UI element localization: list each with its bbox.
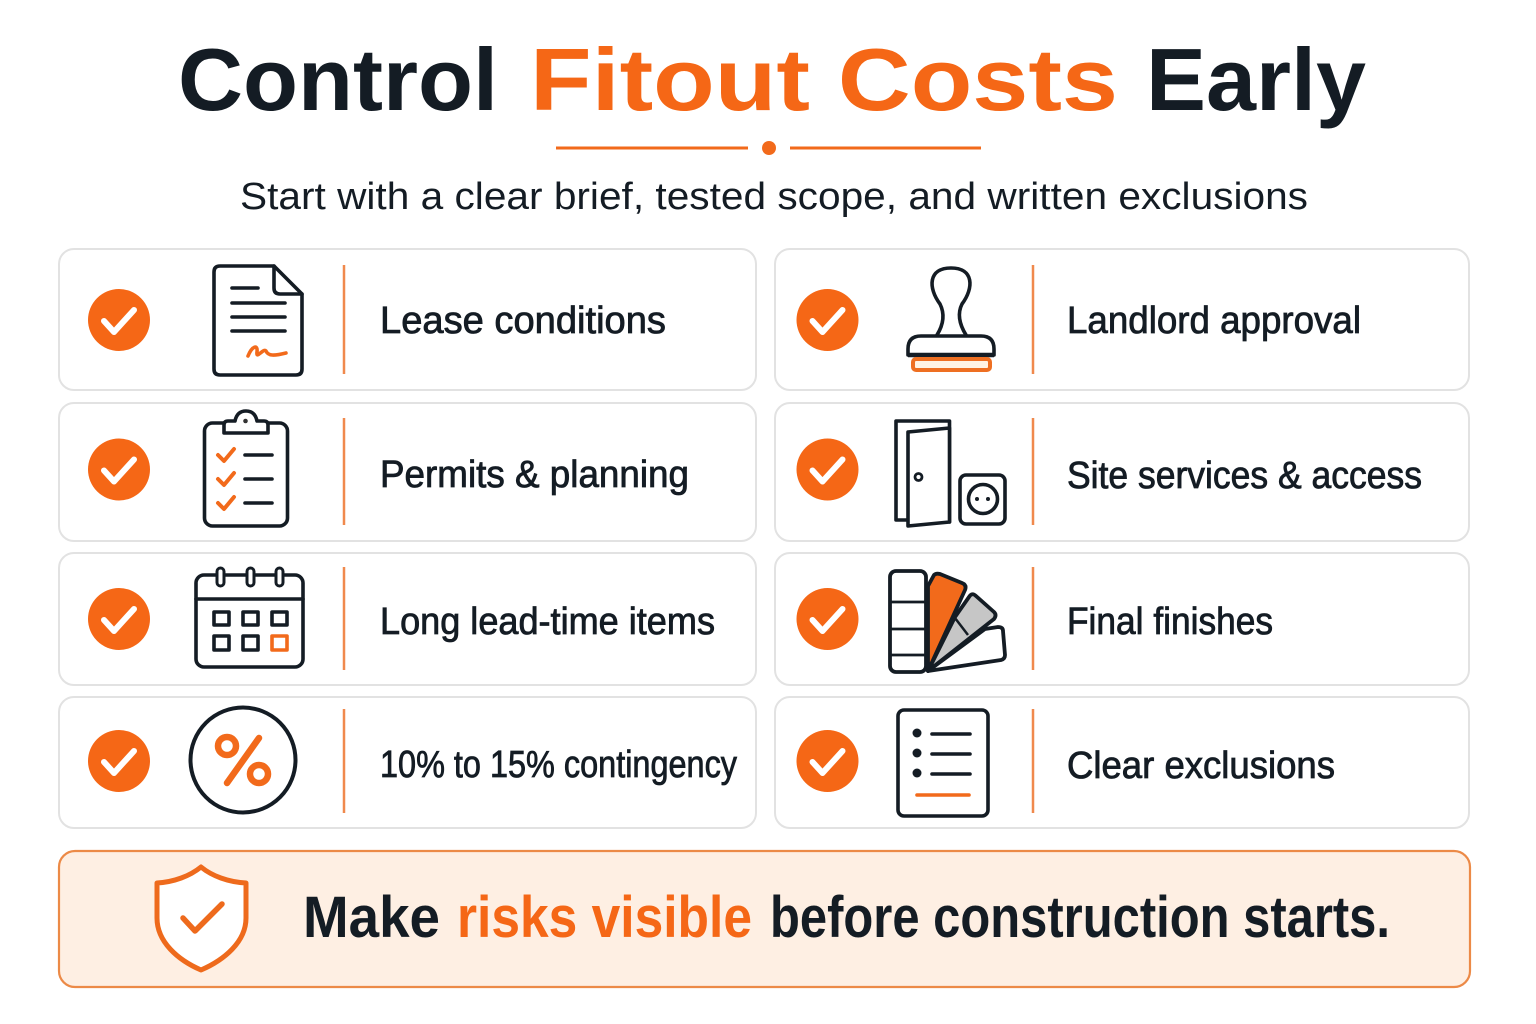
label: Long lead-time items [380, 601, 715, 643]
label: Site services & access [1067, 455, 1422, 497]
panel: permits and planning [59, 403, 756, 541]
panel: final finishes [775, 553, 1469, 685]
callout banner [59, 851, 1470, 987]
callout text: before construction starts. [770, 885, 1390, 950]
icon: signed document [214, 266, 302, 375]
label: 10% to 15% contingency [380, 744, 737, 786]
title: Early [1146, 30, 1366, 129]
icon: calendar [196, 568, 303, 667]
icon: shield check [157, 867, 246, 970]
title [178, 30, 1366, 129]
icon: colour swatch fan [890, 571, 1005, 672]
panel: lease conditions [59, 249, 756, 390]
label: Clear exclusions [1067, 745, 1335, 787]
label: Permits & planning [380, 454, 689, 496]
callout text [303, 885, 1390, 950]
icon: percent circle [190, 708, 296, 812]
label: Final finishes [1067, 601, 1273, 643]
title: Fitout Costs [530, 30, 1118, 129]
icon: list document [898, 710, 988, 816]
subtitle: Start with a clear brief, tested scope, and written exclusions [240, 176, 1308, 218]
callout text: Make [303, 885, 440, 950]
label: Landlord approval [1067, 300, 1361, 342]
icon: clipboard checklist [204, 411, 288, 526]
title: Control [178, 30, 498, 129]
callout text: risks visible [457, 885, 752, 950]
icon: stamp [908, 268, 994, 370]
panel: clear exclusions [775, 697, 1469, 828]
panel: site services and access [775, 403, 1469, 541]
panel: landlord approval [775, 249, 1469, 390]
panel: long lead-time items [59, 553, 756, 685]
icon: door and socket [896, 421, 1005, 526]
panel: contingency [59, 697, 756, 828]
label: Lease conditions [380, 300, 666, 342]
